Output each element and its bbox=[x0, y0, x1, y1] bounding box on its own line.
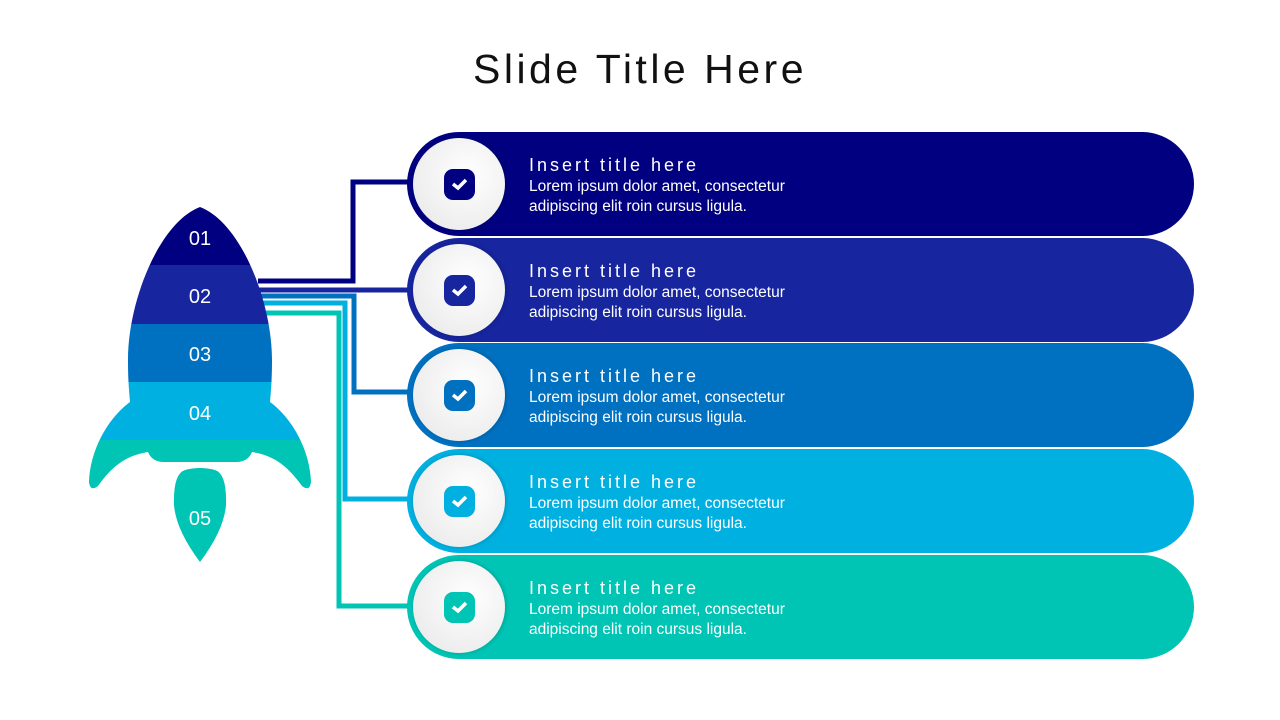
item 2 bbox=[407, 238, 1194, 342]
item 5: adipiscing elit roin cursus ligula. bbox=[529, 620, 747, 638]
rocket: 02 bbox=[189, 286, 211, 308]
item 4: Insert title here bbox=[529, 472, 699, 492]
item 3: Insert title here bbox=[529, 366, 699, 386]
item 1: adipiscing elit roin cursus ligula. bbox=[529, 198, 747, 214]
item 1 bbox=[407, 132, 1194, 236]
item 3: Lorem ipsum dolor amet, consectetur bbox=[529, 389, 785, 406]
rocket bbox=[89, 207, 311, 562]
item 4 bbox=[407, 449, 1194, 553]
rocket: 03 bbox=[189, 344, 211, 366]
item 2: Insert title here bbox=[529, 261, 699, 281]
item 2: Lorem ipsum dolor amet, consectetur bbox=[529, 284, 785, 301]
item 2: adipiscing elit roin cursus ligula. bbox=[529, 304, 747, 320]
item 4: adipiscing elit roin cursus ligula. bbox=[529, 514, 747, 532]
item 1: Lorem ipsum dolor amet, consectetur bbox=[529, 178, 785, 195]
item 3 bbox=[407, 343, 1194, 447]
item 4: Lorem ipsum dolor amet, consectetur bbox=[529, 495, 785, 512]
title: Slide Title Here bbox=[473, 46, 807, 92]
rocket: 01 bbox=[189, 228, 211, 250]
rocket: 04 bbox=[189, 403, 211, 425]
item 5: Lorem ipsum dolor amet, consectetur bbox=[529, 601, 785, 618]
item 1: Insert title here bbox=[529, 155, 699, 175]
rocket: 05 bbox=[189, 508, 211, 530]
item 5: Insert title here bbox=[529, 578, 699, 598]
item 5 bbox=[407, 555, 1194, 659]
item 3: adipiscing elit roin cursus ligula. bbox=[529, 408, 747, 426]
